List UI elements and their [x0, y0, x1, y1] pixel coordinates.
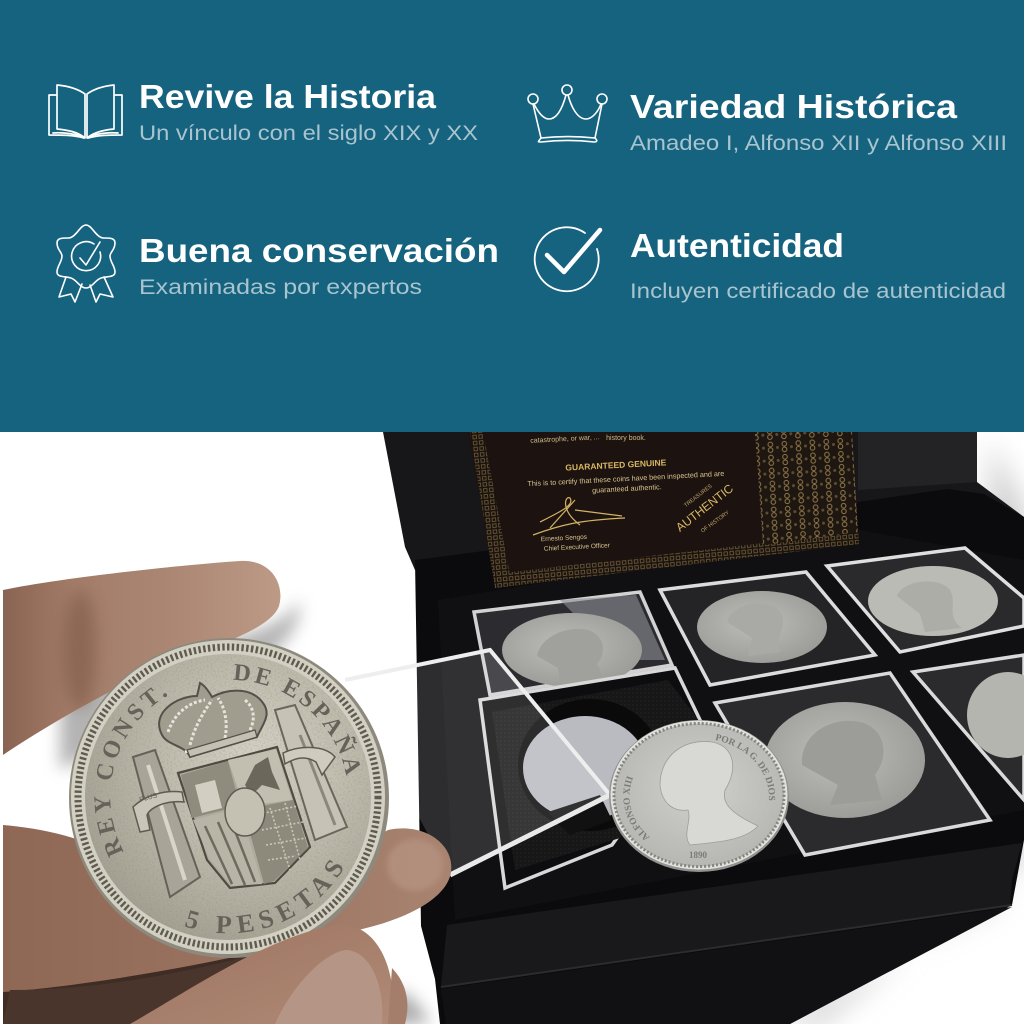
coin portrait	[660, 741, 758, 845]
coin left pillar	[133, 750, 200, 897]
text: Un vínculo: Un vínculo con el siglo XIX y XX	[139, 122, 478, 145]
feature: Variedad Histórica	[528, 85, 1007, 155]
box body	[415, 489, 1024, 1024]
coin legend: 1890	[689, 850, 708, 860]
coin legend: POR LA G. DE DIOS	[715, 734, 776, 800]
coin right ribbon	[283, 747, 335, 775]
coin grain	[86, 654, 370, 940]
finger: index	[3, 561, 280, 755]
icon: crown	[528, 85, 607, 142]
finger: middle and thumb	[3, 825, 451, 992]
text: Amadeo I: Amadeo I, Alfonso XII y Alfonso XIII	[630, 132, 1007, 155]
certificate text: catastrophe, or war, ...	[530, 434, 600, 445]
coin legend: DE ESPAÑA	[233, 664, 360, 776]
card background	[468, 432, 859, 588]
front edge highlight	[441, 905, 1012, 987]
coin scroll labels: PLUS	[139, 792, 159, 804]
shield quarter: castle	[181, 761, 240, 818]
text: Incluyen certificado: Incluyen certificado de autenticidad	[630, 280, 1006, 303]
capsule: top middle	[660, 572, 875, 685]
knuckle shading	[64, 590, 96, 710]
heading: Variedad Histórica: Variedad Histórica	[630, 88, 958, 125]
coin legend	[94, 664, 360, 934]
front wall	[441, 843, 1022, 987]
lid inner band	[858, 432, 977, 490]
certificate text: history book.	[606, 435, 646, 442]
capsule: far right	[913, 655, 1024, 800]
main coin: 5 pesetas	[69, 638, 389, 958]
coin: Alfonso XIII in front	[609, 720, 789, 872]
feature: Buena conservación	[57, 225, 499, 302]
thumb nail	[275, 950, 382, 1024]
coin left ribbon	[133, 792, 184, 832]
certificate text: GUARANTEED GENUINE	[565, 457, 667, 473]
signature	[533, 498, 625, 535]
shield quarter: lion	[228, 749, 292, 806]
palm shadow	[3, 930, 330, 1024]
certificate text: Ernesto Sengos	[541, 534, 588, 543]
certificate text: OF HISTORY	[700, 510, 731, 534]
feature: Revive la Historia	[49, 78, 478, 145]
shield centre oval	[225, 788, 265, 836]
coin right pillar	[275, 705, 347, 840]
card left border	[470, 432, 510, 588]
certificate text: Chief Executive Officer	[544, 542, 611, 553]
panel: features header	[0, 0, 1024, 432]
foam tray	[438, 530, 1024, 920]
coin legend: 5 PESETAS	[185, 860, 342, 934]
box lid	[383, 432, 1024, 570]
feature: Autenticidad	[535, 227, 1006, 303]
hand holding coin	[3, 560, 452, 1024]
capsule: top right	[827, 548, 1024, 652]
shield quarter: stripes	[193, 808, 262, 886]
certificate text	[527, 434, 736, 553]
box shadow	[780, 440, 1024, 1024]
finger: ring edge	[388, 968, 407, 1024]
heading: Revive la Historia: Revive la Historia	[139, 78, 437, 115]
thumb tip highlight	[387, 839, 443, 891]
certificate text: guaranteed authentic.	[592, 482, 662, 495]
heading: Autenticidad: Autenticidad	[630, 227, 844, 264]
icon: open book	[49, 85, 122, 138]
certificate card	[468, 432, 859, 588]
finger: foreground thumb	[130, 925, 394, 1024]
coin display box	[344, 432, 1024, 1024]
certificate text: TREASURES	[683, 483, 714, 509]
shadow between fingers	[3, 935, 330, 1024]
hand shadow	[60, 600, 300, 770]
coin legend	[623, 734, 776, 860]
card gold panel	[755, 432, 858, 545]
capsule: bottom right	[715, 673, 990, 855]
coin shield	[178, 747, 310, 888]
coin legend: REY CONST.	[94, 687, 167, 858]
shield quarter: checks	[245, 800, 308, 884]
coin crown	[159, 683, 267, 757]
capsule: open lid	[345, 650, 610, 875]
icon: rosette with check	[57, 225, 115, 302]
shadow: lower hand	[380, 990, 430, 1024]
coin legend: ALFONSO XIII	[623, 776, 650, 840]
panel: photo background	[0, 432, 1024, 1024]
card bottom border	[495, 532, 859, 588]
heading: Buena conservación: Buena conservación	[139, 232, 499, 269]
certificate text: AUTHENTIC	[673, 481, 736, 535]
capsule: top left	[474, 592, 672, 695]
icon: check circle	[535, 227, 600, 291]
capsule: open base	[480, 668, 700, 888]
text: Examinadas: Examinadas por expertos	[139, 276, 422, 299]
crown jewels	[168, 698, 255, 752]
bottom face	[441, 907, 1012, 1024]
certificate text: This is to certify that these coins have been inspected and are	[527, 469, 724, 488]
